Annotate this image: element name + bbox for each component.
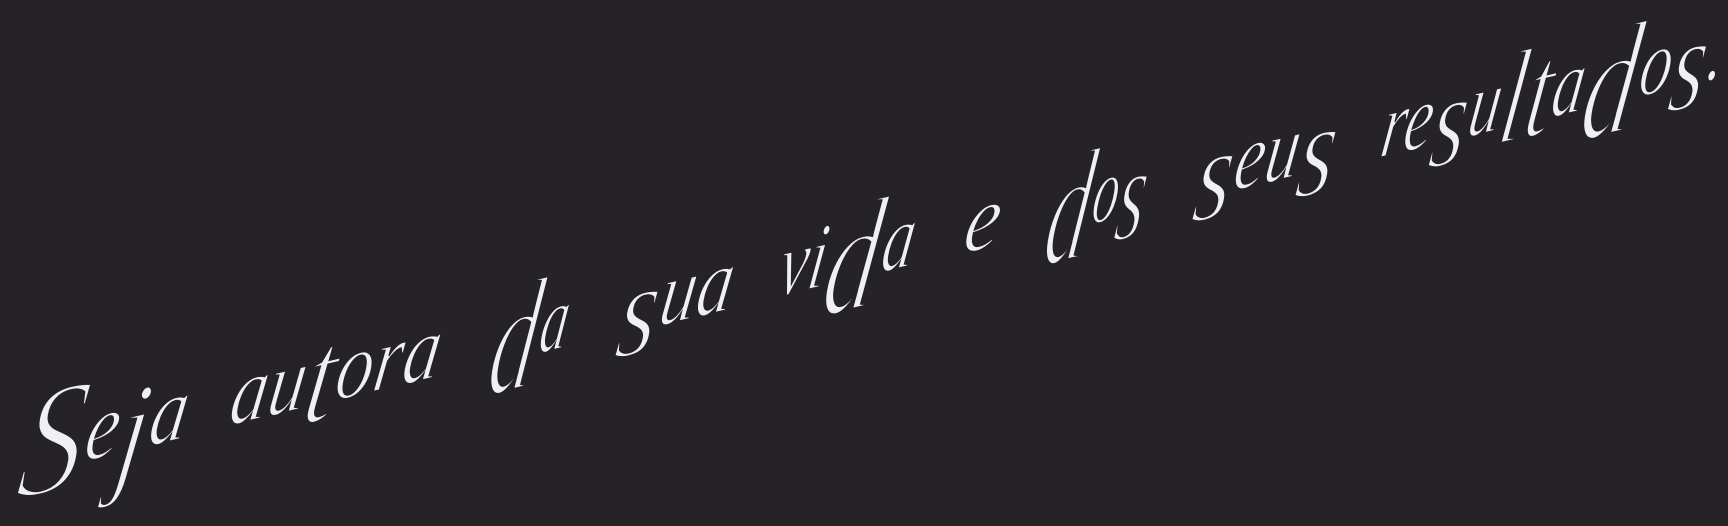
word: resultados.: lt [1491,15,1567,175]
word: Seja: e [79,370,129,482]
word: Seja: a [143,354,197,467]
word: resultados.: s [1421,43,1480,199]
word: da: a [534,263,578,374]
word: autora: t [295,300,350,455]
word: sua: ua [653,225,743,347]
word: vida: vi [773,198,851,317]
word: vida: a [876,181,924,293]
word: dos: s [1107,117,1159,272]
word: dos: d [1035,114,1107,302]
word: seus: s [1288,72,1349,229]
word: resultados.: u [1462,46,1511,158]
word: autora: ora [329,293,450,422]
word: resultados.: re [1375,58,1459,178]
word: da: d [479,243,555,432]
word: seus: eu [1228,92,1309,212]
word: autora: au [224,322,326,446]
word: Seja: j [96,354,161,512]
word: vida: d [813,162,897,353]
word: dos: o [1086,134,1128,245]
word: resultados.: a [1546,26,1594,138]
word: seus: s [1185,97,1246,253]
word: e: e [958,162,1010,274]
word: resultados.: o [1633,6,1682,118]
word: sua: s [608,232,671,389]
